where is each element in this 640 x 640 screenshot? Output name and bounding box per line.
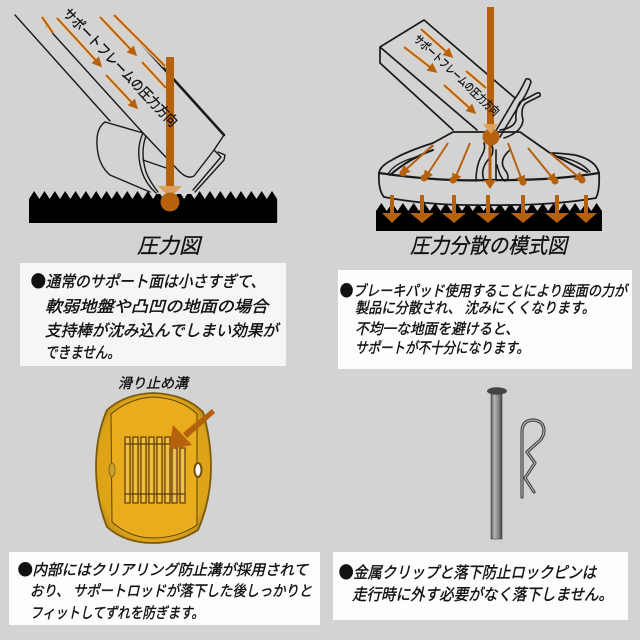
rotated label: サポートフレームの圧力方向 [411, 32, 502, 119]
text block: pressure note [20, 263, 286, 366]
text block: groove note: おり、 サポートロッドが落下した後しっかりと [30, 583, 312, 600]
dispersed arrows [400, 143, 586, 186]
text block: pressure note: できません。 [45, 345, 120, 362]
panel: pressure diagram [15, 5, 277, 223]
arrow [169, 409, 215, 449]
brake pad [379, 132, 599, 205]
text block: pressure note: ●通常のサポート面は小さすぎて、 [31, 268, 265, 292]
ground [376, 203, 602, 231]
text block: groove note: ●内部にはクリアリング防止溝が採用されて [18, 559, 309, 580]
heading: dispersion diagram: 圧力分散の模式図 [410, 235, 570, 258]
text block: pressure note: 軟弱地盤や凸凹の地面の場合 [45, 298, 270, 316]
text block: dispersion note: 不均一な地面を避けると、 [355, 321, 519, 338]
ground arrows [382, 195, 597, 223]
grooves [125, 437, 185, 503]
support frame [380, 20, 515, 130]
text block: dispersion note: サポートが不十分になります。 [355, 340, 529, 357]
main pressure arrow [158, 57, 182, 212]
label: anti-slip groove: 滑り止め溝 [118, 375, 190, 391]
inner outline [111, 397, 197, 538]
text block: pin note [333, 552, 628, 620]
text block: pin note: 走行時に外す必要がなく落下しません。 [352, 586, 613, 604]
panel: dispersion diagram [376, 7, 602, 231]
text block: groove note [9, 552, 320, 625]
illustration: lock pin [487, 387, 507, 539]
rotated label: サポートフレームの圧力方向 [60, 5, 181, 130]
text block: pressure note: 支持棒が沈み込んでしまい効果が [45, 322, 281, 340]
illustration: metal clip [522, 420, 544, 497]
ground [29, 191, 277, 223]
pressure direction arrows [42, 15, 166, 107]
text block: groove note: フィットしてずれを防ぎます。 [30, 605, 204, 622]
pad body [96, 393, 211, 543]
text block: dispersion note [338, 270, 632, 369]
frame pressure arrows [404, 29, 486, 112]
clip pins [494, 79, 540, 138]
text block: dispersion note: 製品に分散され、 沈みにくくなります。 [355, 300, 595, 317]
text block: pin note: ●金属クリップと落下防止ロックピンは [339, 559, 598, 583]
main pressure arrow [482, 7, 500, 189]
heading: pressure diagram: 圧力図 [137, 235, 203, 258]
side slots [109, 463, 202, 477]
support frame and bracket [15, 15, 225, 194]
illustration: yellow pad [96, 393, 215, 543]
